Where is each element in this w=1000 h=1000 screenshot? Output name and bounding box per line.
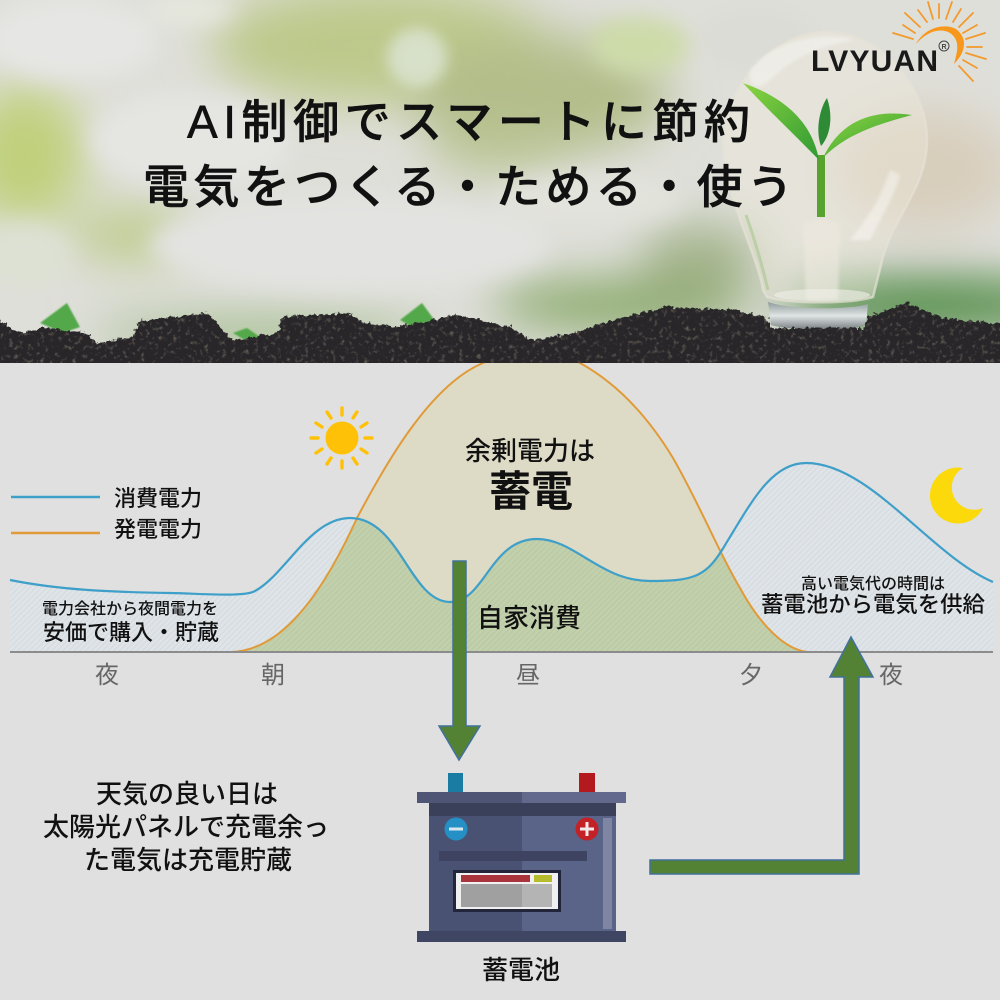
callout: surplus power: 蓄電 bbox=[489, 468, 573, 515]
callout: battery supply: 高い電気代の時間は bbox=[801, 575, 945, 593]
legend bbox=[11, 486, 202, 542]
time axis labels: 朝 bbox=[261, 662, 285, 689]
hero photo background bbox=[0, 0, 1000, 375]
line: consumption bbox=[10, 463, 993, 602]
title: AI制御でスマートに節約 bbox=[187, 96, 750, 148]
power curve chart bbox=[10, 353, 993, 652]
logo: LVYUAN: LVYUAN bbox=[811, 45, 938, 78]
callout: sunny day text: た電気は充電貯蔵 bbox=[84, 845, 292, 875]
icon: crescent moon bbox=[930, 468, 983, 524]
icon: battery bbox=[417, 773, 626, 942]
line: generation bbox=[232, 353, 808, 652]
time axis labels: 昼 bbox=[516, 662, 540, 689]
area: generation bbox=[358, 363, 720, 601]
hatch overlay bbox=[10, 463, 993, 652]
logo: LVYUAN bbox=[811, 2, 986, 81]
time axis labels: 夜 bbox=[879, 662, 903, 689]
icon: light bulb with sprout bbox=[723, 32, 927, 330]
area: self consumption overlap bbox=[246, 520, 798, 651]
legend: 発電電力 bbox=[114, 517, 202, 542]
callout: night purchase: 電力会社から夜間電力を bbox=[42, 600, 218, 618]
area: consumption bbox=[10, 463, 993, 652]
callout: surplus power bbox=[465, 436, 595, 515]
legend: 消費電力 bbox=[114, 486, 202, 511]
callout: battery supply bbox=[761, 575, 986, 617]
label: self consumption: 自家消費 bbox=[477, 603, 581, 633]
logo: LVYUAN: R bbox=[941, 44, 947, 51]
axis line bbox=[10, 651, 993, 653]
callout: sunny day text bbox=[43, 779, 329, 875]
time axis labels: 夜 bbox=[95, 662, 119, 689]
callout: battery supply: 蓄電池から電気を供給 bbox=[761, 592, 986, 617]
soil ground bbox=[0, 302, 1000, 363]
callout: surplus power: 余剰電力は bbox=[465, 436, 595, 466]
callout: sunny day text: 天気の良い日は bbox=[96, 779, 278, 809]
callout: night purchase bbox=[42, 600, 219, 645]
title bbox=[143, 96, 793, 213]
callout: sunny day text: 太陽光パネルで充電余っ bbox=[43, 812, 329, 842]
time axis labels: 夕 bbox=[739, 662, 763, 689]
arrow: discharge up from battery bbox=[650, 637, 873, 874]
callout: night purchase: 安価で購入・貯蔵 bbox=[43, 620, 219, 645]
icon: sun bbox=[311, 408, 372, 468]
title: 電気をつくる・ためる・使う bbox=[143, 161, 793, 213]
time axis labels bbox=[95, 662, 903, 689]
chart panel background bbox=[0, 363, 1000, 1000]
arrow: charge down to battery bbox=[439, 561, 480, 760]
label: battery: 蓄電池 bbox=[482, 955, 560, 985]
